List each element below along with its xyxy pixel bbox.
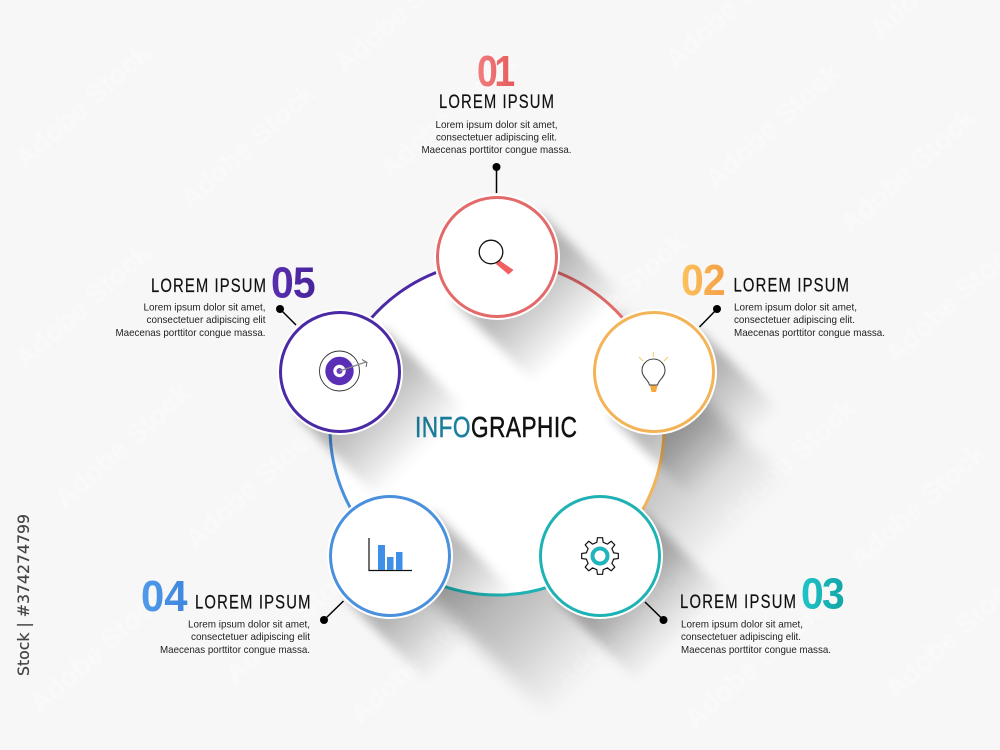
node 1 shadow — [453, 213, 629, 389]
watermark pattern: Adobe Stock — [48, 377, 197, 514]
icon: gear — [582, 538, 618, 574]
text block 02 — [681, 257, 885, 339]
node 2: idea — [591, 309, 717, 435]
node 5: target — [277, 309, 403, 435]
text block 04: Lorem ipsum dolor sit amet, — [188, 618, 310, 630]
watermark pattern: Adobe Stock — [698, 57, 847, 194]
center title: INFOGRAPHIC — [415, 410, 577, 444]
text block 01: Lorem ipsum dolor sit amet, — [436, 119, 558, 131]
node 3: settings — [537, 493, 663, 619]
text block 03: Maecenas porttitor congue massa. — [681, 644, 831, 656]
arc: blue — [330, 376, 399, 563]
text block 05 — [116, 259, 316, 339]
node 4: chart — [327, 493, 453, 619]
watermark pattern: Adobe Stock — [343, 592, 492, 729]
node 5 shadow — [296, 328, 472, 504]
watermark pattern: Adobe Stock — [678, 597, 827, 734]
node 2 shadow — [610, 328, 786, 504]
arc: orange — [595, 376, 664, 563]
text block 02: 02 — [681, 257, 726, 305]
arc: purple — [338, 261, 497, 376]
text block 02: Maecenas porttitor congue massa. — [734, 327, 885, 339]
connector 4 — [320, 601, 344, 624]
watermark pattern: Adobe Stock — [373, 47, 522, 184]
text block 04 — [141, 572, 310, 656]
watermark pattern: Adobe Stock — [218, 552, 367, 689]
connector 2 — [700, 305, 721, 327]
text block 01 — [422, 46, 572, 156]
watermark pattern: Adobe Stock — [8, 37, 157, 174]
connector 3 — [645, 602, 668, 624]
connector 1 — [492, 163, 500, 193]
watermark pattern: Adobe Stock — [843, 437, 992, 574]
central circle with five coloured arcs — [329, 260, 665, 596]
connector 5 — [276, 305, 296, 325]
text block 01: consectetuer adipiscing elit. — [436, 132, 557, 144]
text block 05: 05 — [271, 259, 316, 308]
text block 01: Maecenas porttitor congue massa. — [422, 144, 572, 156]
text block 04: Maecenas porttitor congue massa. — [160, 644, 310, 656]
icon: target — [320, 351, 367, 391]
text block 04: consectetuer adipiscing elit — [191, 631, 310, 643]
node 3 shadow — [556, 512, 732, 688]
arc: red — [497, 261, 656, 376]
watermark pattern: Adobe Stock — [543, 227, 692, 364]
text block 05: Maecenas porttitor congue massa. — [116, 327, 266, 339]
text block 03 — [680, 570, 845, 656]
text block 04: LOREM IPSUM — [195, 592, 310, 613]
watermark pattern: Adobe Stock — [8, 237, 157, 374]
watermark pattern: Adobe Stock — [23, 582, 172, 719]
text block 05: consectetuer adipiscing elit — [146, 314, 266, 326]
text block 03: LOREM IPSUM — [680, 591, 796, 612]
watermark pattern: Adobe Stock — [713, 392, 862, 529]
text block 01: LOREM IPSUM — [439, 91, 554, 112]
stock id side label: Stock | #374274799 — [14, 514, 33, 676]
icon: light bulb — [639, 352, 668, 392]
text block 02: Lorem ipsum dolor sit amet, — [734, 302, 857, 314]
text block 03: 03 — [801, 570, 845, 619]
watermark pattern: Adobe Stock — [173, 77, 322, 214]
text block 01: 01 — [477, 46, 515, 96]
text block 03: Lorem ipsum dolor sit amet, — [681, 618, 803, 630]
watermark pattern: Adobe Stock — [548, 557, 697, 694]
text block 02: LOREM IPSUM — [734, 275, 849, 296]
text block 05: LOREM IPSUM — [151, 275, 266, 296]
big circle long shadow — [379, 310, 792, 723]
arc: teal — [399, 563, 595, 595]
icon: bar chart — [369, 538, 412, 570]
text block 03: consectetuer adipiscing elit. — [681, 631, 801, 643]
node 1: search — [434, 194, 560, 320]
watermark pattern: Adobe Stock — [833, 102, 982, 239]
watermark pattern: Adobe Stock — [178, 417, 327, 554]
text block 02: consectetuer adipiscing elit. — [734, 314, 855, 326]
icon: magnifier — [479, 240, 514, 274]
text block 05: Lorem ipsum dolor sit amet, — [144, 302, 266, 314]
text block 04: 04 — [141, 572, 188, 621]
node 4 shadow — [346, 512, 522, 688]
